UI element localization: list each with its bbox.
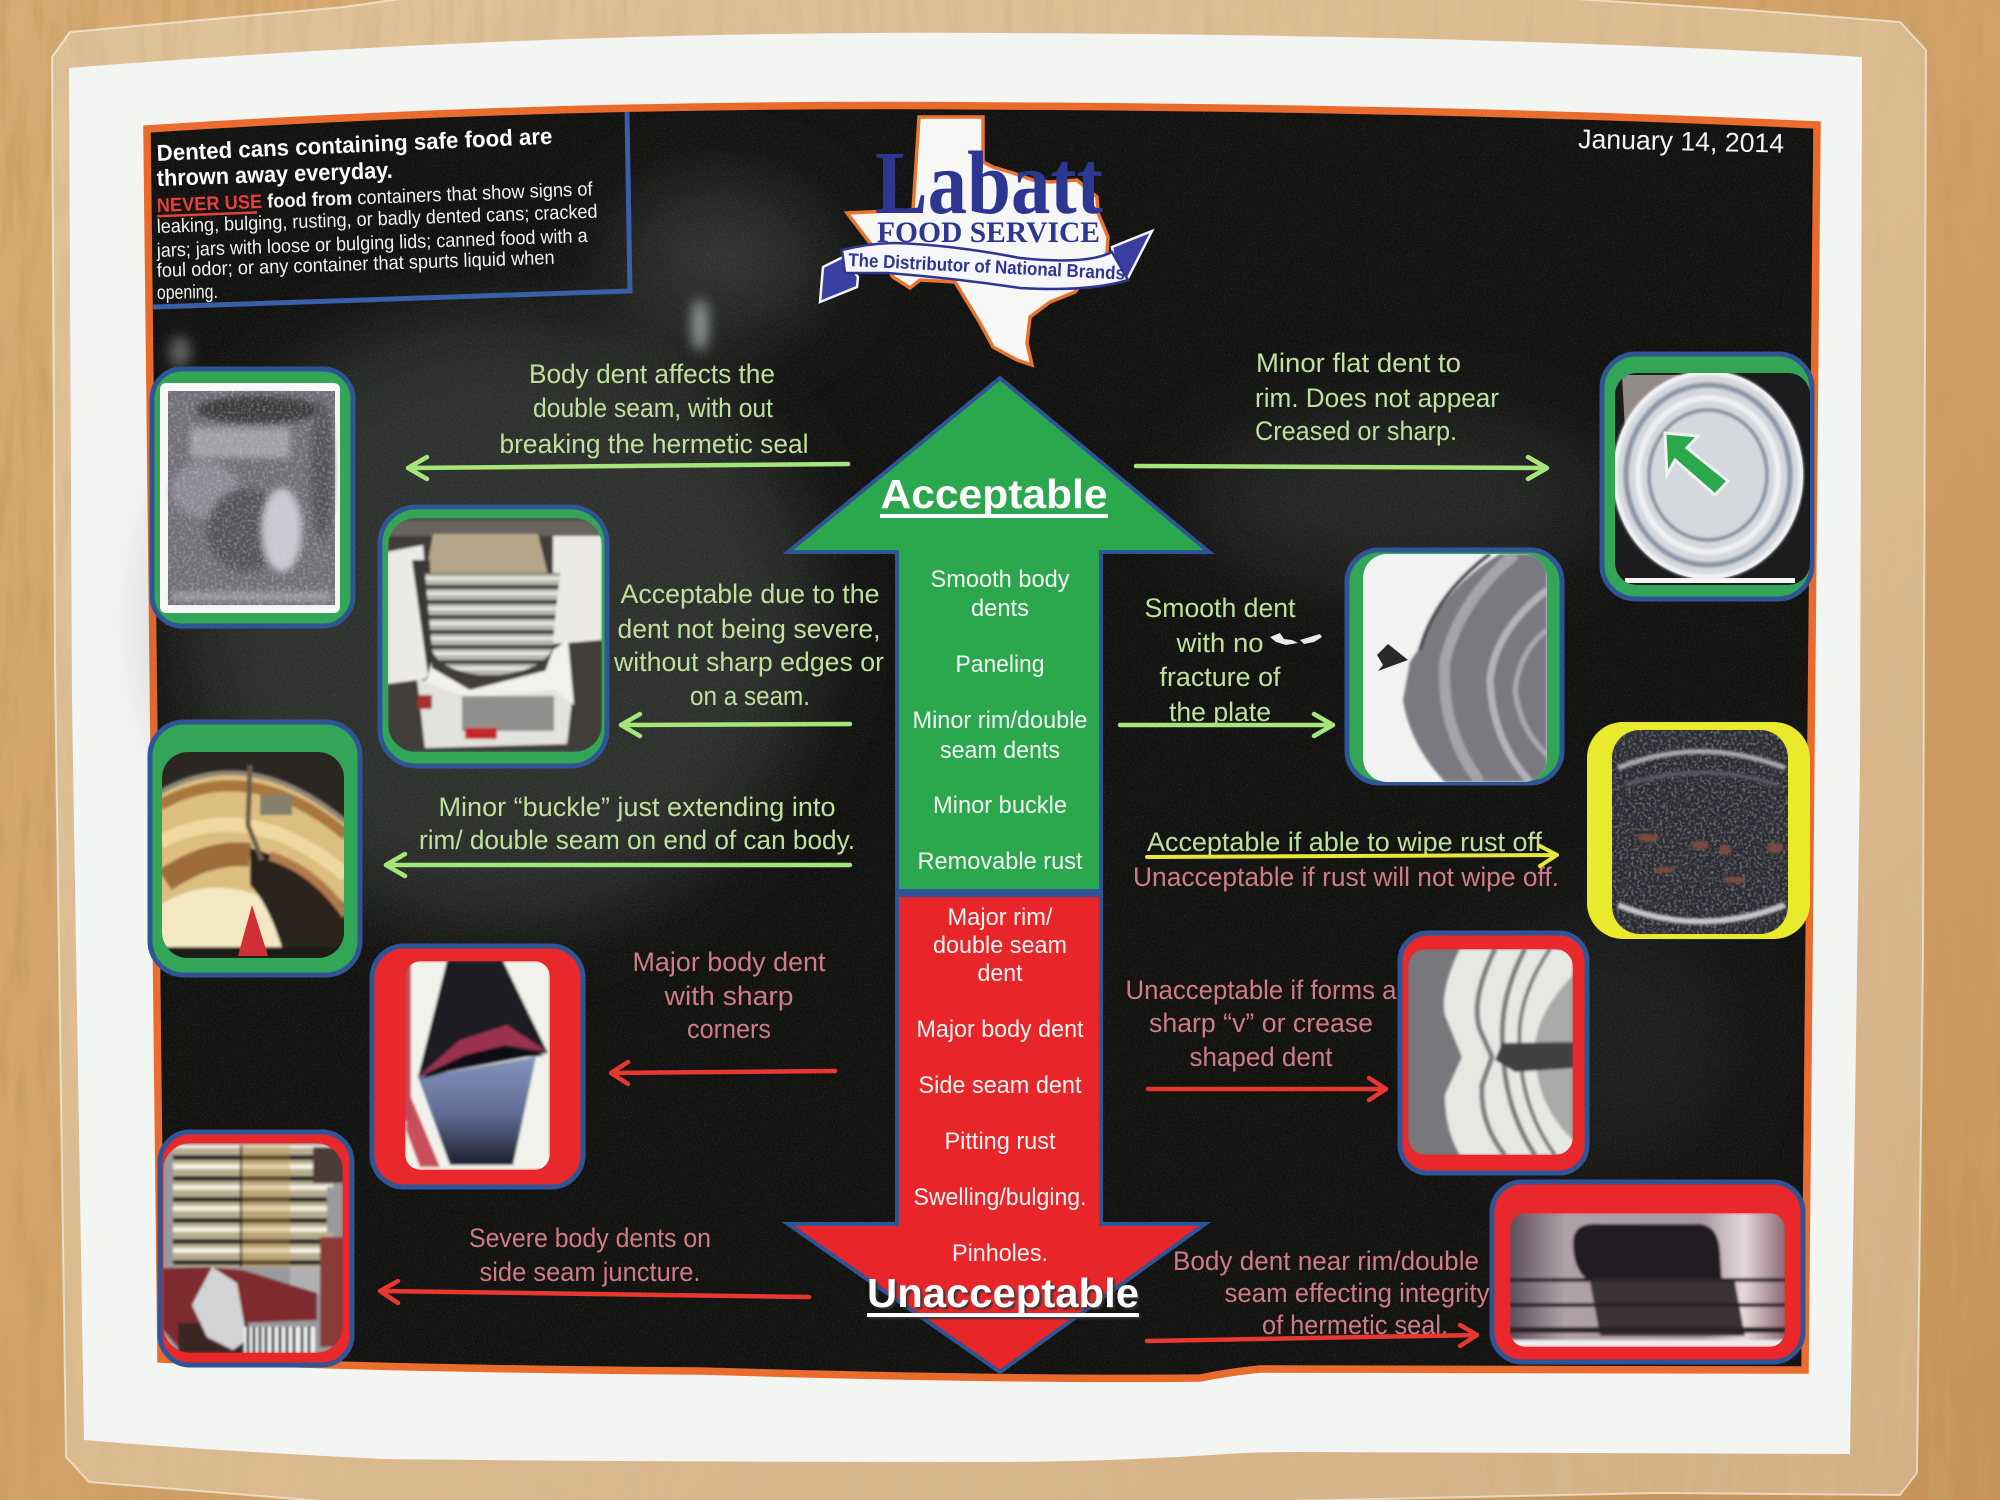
unacceptable list: Swelling/bulging. [914,1184,1086,1211]
callout: body dent near rim: seam effecting integrity [1224,1278,1490,1308]
callout: body dent affects double seam: double seam, with out [533,393,773,423]
acceptable list: seam dents [940,737,1060,764]
callout: major body dent: Major body dent [632,947,826,977]
acceptable list: Paneling [956,651,1044,678]
callout: acceptable due to dent not severe: dent not being severe, [618,614,880,644]
photo tile: major body dent [372,946,583,1187]
unacceptable list: Side seam dent [918,1072,1082,1099]
warning body: NEVER USE food from containers that show signs of [156,178,593,217]
callout: acceptable due to dent not severe [613,579,884,711]
acceptable list: dents [971,595,1029,622]
callout: minor flat dent to rim [1255,348,1499,446]
unacceptable list [914,904,1086,1267]
acceptable list: Smooth body [930,566,1070,593]
callout: smooth dent [1144,593,1296,727]
photo tile: rust on can end [1587,722,1810,939]
logo: ribbon banner [820,231,1152,302]
warning heading [156,123,553,191]
photo tile: body dent on seam [152,369,353,626]
photo tile: flat dent to rim [1602,354,1812,599]
photo tile: dent near double seam [1492,1182,1803,1362]
callout: body dent affects double seam: Body dent affects the [529,359,775,389]
arrow: to buckle photo [386,854,850,876]
callout: smooth dent: with no [1175,628,1264,658]
acceptable list: Removable rust [918,848,1083,875]
arrow: to crushed can photo [621,714,850,736]
arrow: to body dent photo [408,457,848,479]
callout: body dent near rim: of hermetic seal. [1262,1310,1448,1340]
callout: sharp v crease: shaped dent [1190,1042,1333,1072]
acceptable list: Minor rim/double [912,707,1088,734]
warning body: jars; jars with loose or bulging lids; canned food with a [155,225,588,262]
callout: severe body dents: side seam juncture. [480,1257,700,1287]
callout: minor buckle: rim/ double seam on end of can body. [419,825,855,855]
callout: minor buckle: Minor “buckle” just extending into [438,792,836,822]
arrow: to near rim dent photo [1147,1325,1477,1346]
photo tile: crushed ribbed can [380,507,607,766]
central arrow: acceptable (green) [788,378,1209,891]
callout: major body dent: corners [687,1014,771,1044]
logo: tagline: The Distributor of National Brands [848,249,1125,284]
heading: Acceptable: Acceptable [880,471,1108,517]
logo: wordmark: Labatt [875,134,1103,233]
callout: acceptable due to dent not severe: Acceptable due to the [620,579,880,609]
logo: Texas shape [847,117,1108,365]
logo: Labatt Food Service [820,117,1152,365]
callout: sharp v crease: Unacceptable if forms a [1126,975,1397,1005]
photo tile: minor buckle on rim [150,722,360,975]
arrow: to smooth dent photo [1120,714,1333,736]
callout: rust wipe [1133,827,1559,892]
callout: minor buckle [419,792,855,855]
unacceptable list: Major body dent [916,1016,1084,1043]
warning body: foul odor; or any container that spurts liquid when [156,247,555,282]
callout: smooth dent: fracture of [1160,662,1281,692]
central arrow: unacceptable (red) [788,895,1205,1372]
unacceptable list: Major rim/ [948,904,1053,931]
callout: body dent near rim [1173,1246,1490,1340]
arrow: to flat rim dent photo [1136,457,1547,479]
callout: acceptable due to dent not severe: without sharp edges or [613,647,884,677]
warning body: opening. [157,281,218,304]
unacceptable list: Pinholes. [952,1240,1048,1267]
callout: body dent affects double seam [500,359,808,459]
callout: body dent near rim: Body dent near rim/double [1173,1246,1479,1276]
callout: major body dent [632,947,826,1044]
heading: Unacceptable: Unacceptable [867,1270,1139,1316]
warning body [155,178,598,304]
logo: wordmark: FOOD SERVICE [877,216,1100,249]
date: January 14, 2014 [1578,124,1784,159]
callout: minor flat dent to rim: Minor flat dent to [1256,348,1461,378]
acceptable list [912,566,1088,875]
callout: body dent affects double seam: breaking the hermetic seal [500,429,808,459]
callout: minor flat dent to rim: rim. Does not appear [1255,383,1499,413]
callout: rust wipe: Acceptable if able to wipe rust off [1147,827,1542,857]
photo tile: severe dent on side seam [160,1132,352,1365]
callout: severe body dents: Severe body dents on [469,1223,711,1253]
arrow: to severe dent photo [380,1281,809,1303]
callout: rust wipe: Unacceptable if rust will not wipe off. [1133,862,1559,892]
photo tile: v shaped crease [1400,933,1587,1173]
callout: acceptable due to dent not severe: on a seam. [690,681,810,711]
black poster panel with orange border [147,105,1817,1378]
photo tile: smooth rim dent [1347,550,1562,783]
callout: severe body dents [469,1223,711,1287]
arrow: to major body dent photo [611,1062,835,1084]
unacceptable list: double seam [933,932,1067,959]
arrow: to rust photo [1147,846,1557,866]
unacceptable list: dent [978,960,1023,987]
callout: smooth dent: the plate [1169,697,1271,727]
callout: minor flat dent to rim: Creased or sharp. [1255,416,1457,446]
warning body: leaking, bulging, rusting, or badly dented cans; cracked [156,201,598,238]
callout: smooth dent: Smooth dent [1144,593,1296,623]
warning heading: Dented cans containing safe food are [156,123,553,166]
unacceptable list: Pitting rust [944,1128,1056,1155]
acceptable list: Minor buckle [933,792,1067,819]
callout: sharp v crease: sharp “v” or crease [1149,1008,1373,1038]
warning heading: thrown away everyday. [156,157,393,191]
warning text box [153,112,630,307]
arrow: to v dent photo [1148,1078,1386,1100]
callout: sharp v crease [1126,975,1397,1072]
callout: major body dent: with sharp [663,981,794,1011]
